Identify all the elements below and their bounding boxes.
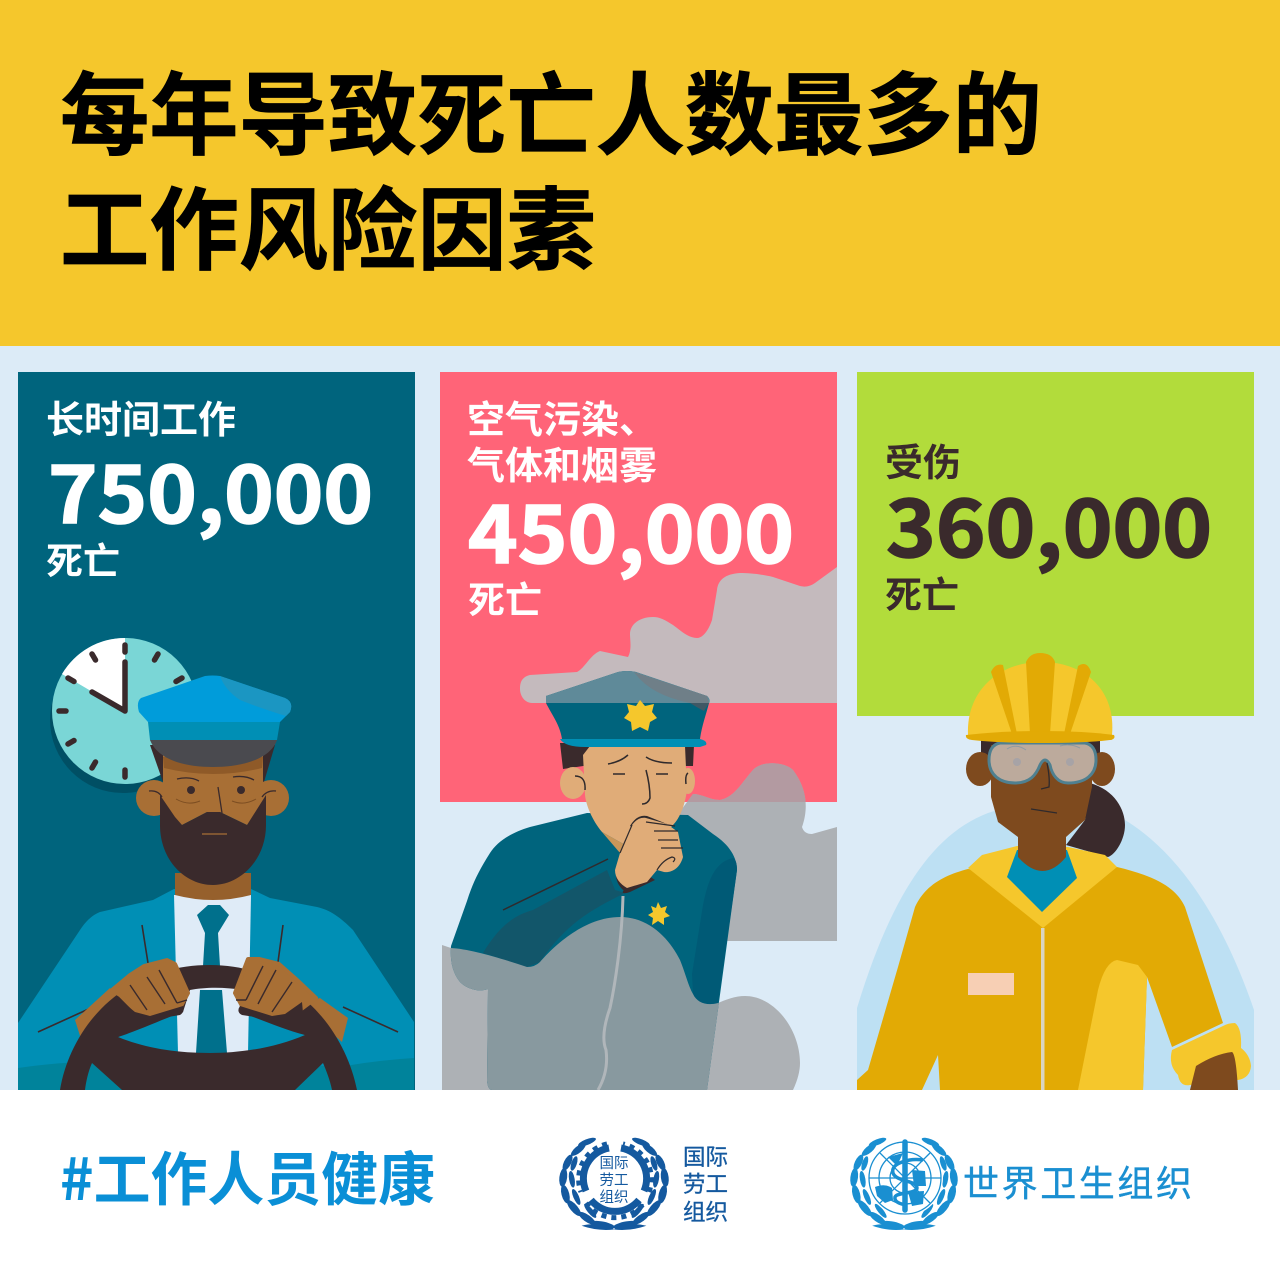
ILO name: 劳工 [683, 1167, 728, 1199]
smoke: lower cloud [442, 917, 800, 1090]
illustration: construction worker [857, 653, 1254, 1090]
logo: ILO: 国际 [600, 1152, 628, 1173]
hard hat [966, 653, 1114, 743]
title: 每年导致死亡人数最多的 [60, 43, 1042, 173]
heading: injuries: 受伤 [885, 432, 961, 487]
star badge [648, 902, 670, 925]
label: deaths: 死亡 [885, 565, 959, 619]
name badge [968, 973, 1014, 995]
panel: injuries [857, 372, 1254, 1090]
title [60, 43, 1042, 288]
hashtag: #工作人员健康 [60, 1133, 435, 1217]
driver hat [138, 676, 291, 767]
logo: ILO: 劳工 [600, 1169, 628, 1190]
ILO name: 国际 [683, 1140, 728, 1172]
header band [0, 0, 1280, 346]
logo: ILO: 组织 [600, 1186, 628, 1207]
illustration: driver [18, 676, 414, 1090]
ILO name [683, 1140, 728, 1227]
ILO name: 组织 [683, 1195, 728, 1227]
number: 750,000: 750,000 [48, 434, 373, 546]
illustration: coughing police officer [450, 671, 737, 1090]
footer band [0, 1090, 1280, 1280]
title: 工作风险因素 [60, 158, 596, 288]
police hat [546, 671, 710, 747]
label: deaths: 死亡 [468, 570, 542, 624]
WHO name: 世界卫生组织 [963, 1155, 1192, 1207]
number: 450,000: 450,000 [468, 474, 794, 586]
panel: air pollution [440, 372, 837, 1090]
panel: long working hours [18, 372, 415, 1090]
heading: long working hours: 长时间工作 [46, 389, 236, 444]
logo: ILO [558, 1136, 670, 1230]
icon: clock [50, 638, 198, 793]
heading: air pollution, gases and fumes: 气体和烟雾 [467, 435, 657, 490]
label: deaths: 死亡 [46, 531, 120, 585]
heading: air pollution, gases and fumes: 空气污染、 [467, 389, 657, 444]
logo: WHO [849, 1136, 959, 1230]
smoke: right cloud [670, 763, 837, 941]
number: 360,000: 360,000 [886, 468, 1212, 580]
smoke: upper cloud [520, 567, 837, 703]
heading: air pollution, gases and fumes [467, 389, 657, 490]
